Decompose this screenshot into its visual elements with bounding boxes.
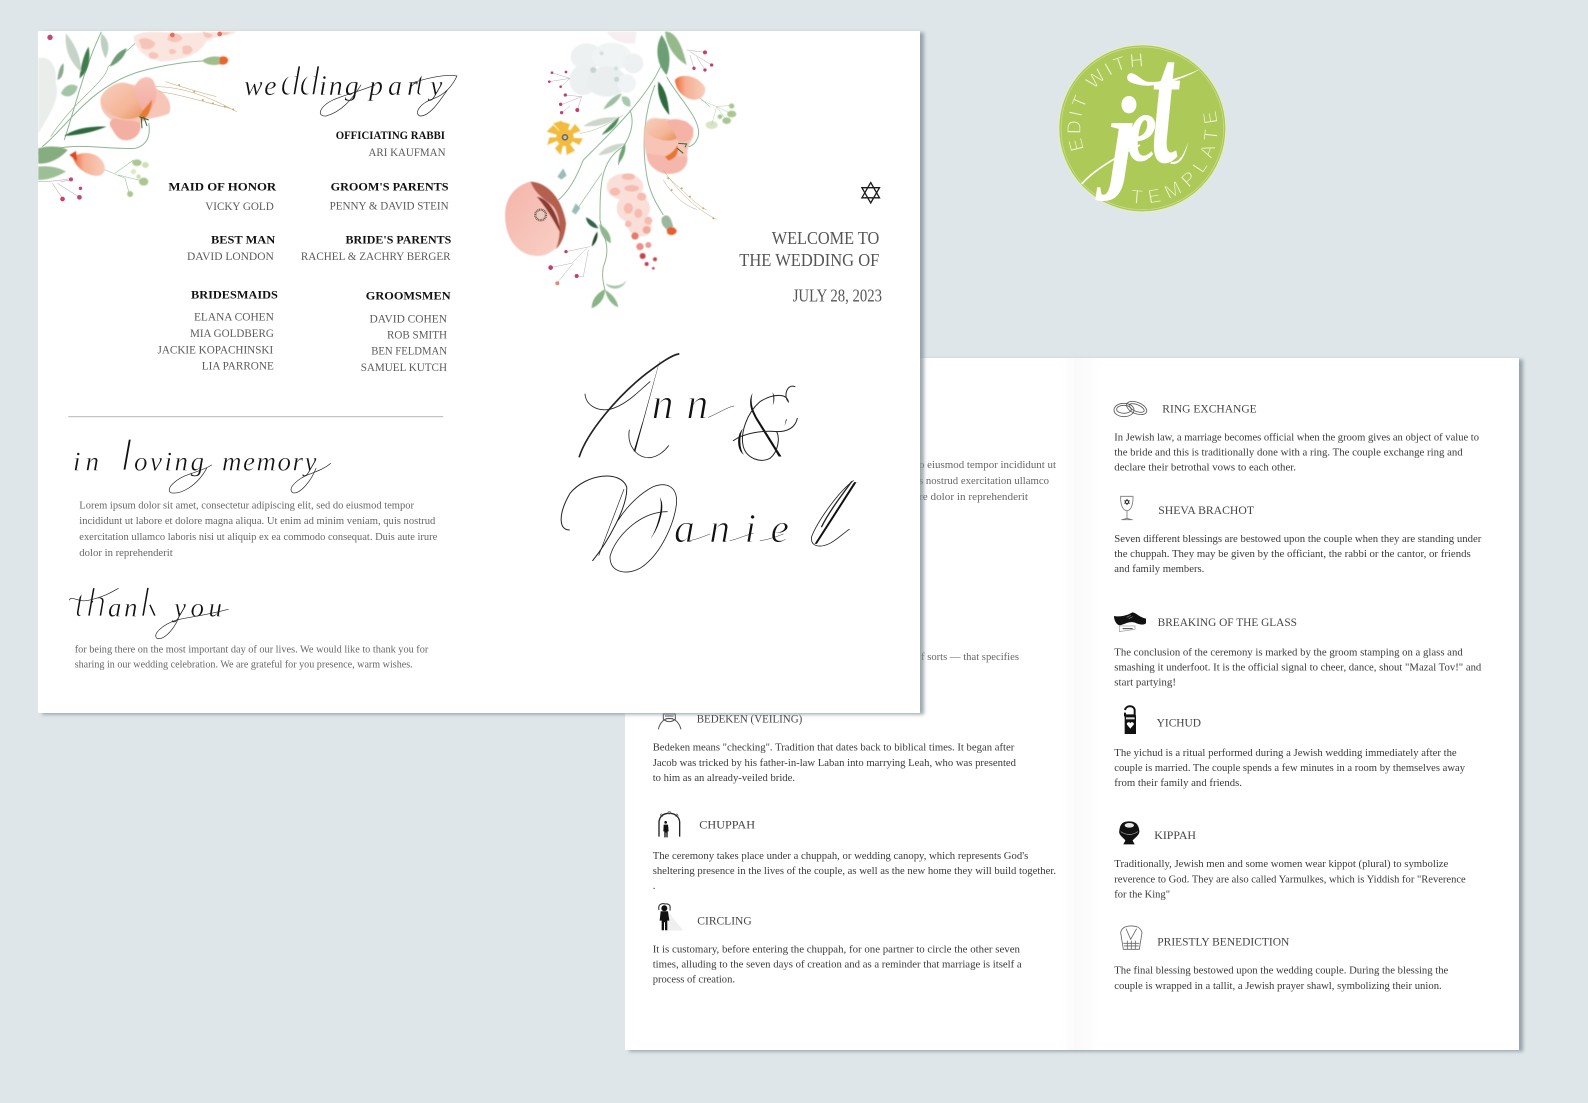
body [1114, 965, 1448, 992]
section: ring exchange [1114, 399, 1479, 474]
title: wedding party: par [367, 71, 423, 102]
logo: edit with jet template [1058, 4, 1227, 212]
title: in loving memory: oving [134, 447, 206, 477]
icon: wine glass [1121, 496, 1133, 520]
body: declare their betrothal vows to each other. [1114, 462, 1296, 474]
Ann &: nn [652, 379, 708, 428]
icon: kippah [1119, 821, 1139, 844]
Daniel: anie [674, 506, 789, 552]
text: in loving memory: exercitation ullamco laboris nisi ut aliquip ex ea commodo consequat. Duis aute irure [79, 531, 437, 543]
bride's parents [301, 234, 451, 263]
body [1114, 646, 1482, 688]
white hydrangea [569, 32, 643, 97]
title: thank you: you [171, 593, 226, 623]
welcome text: THE WEDDING OF [739, 250, 880, 270]
section: sheva brachot [1114, 496, 1482, 575]
body: Traditionally, Jewish men and some women wear kippot (plural) to symbolize [1114, 858, 1448, 870]
icon: door hanger [1125, 706, 1136, 734]
swash [69, 588, 228, 639]
text: thank you: sharing in our wedding celebration. We are grateful for you presence, warm wishes. [75, 659, 413, 671]
icon: rings [1114, 399, 1149, 417]
groomsmen: SAMUEL KUTCH [361, 362, 447, 374]
text: template: TEMPLATE [1132, 112, 1218, 204]
Ann &: & [732, 359, 797, 486]
wedding party list [158, 129, 451, 374]
groomsmen: BEN FELDMAN [371, 346, 447, 358]
floral: cover bouquet [505, 32, 736, 308]
Ann &: A [527, 318, 715, 493]
bud [661, 215, 677, 235]
icon: tallit [1121, 926, 1142, 949]
officiating rabbi [336, 129, 446, 159]
title: in loving memory: memory [222, 447, 318, 477]
body: the chuppah. They may be given by the officiant, the rabbi or the cantor, or friends [1114, 548, 1471, 560]
partly hidden text, left page: f sorts — that specifies [921, 651, 1019, 663]
badge circle [1059, 45, 1226, 212]
leaves [38, 33, 127, 180]
body: smashing it underfoot. It is the official signal to cheer, dance, shout "Mazal Tov!" and [1114, 661, 1482, 673]
swash [561, 476, 853, 572]
body: Seven different blessings are bestowed upon the couple when they are standing under [1114, 533, 1482, 545]
wordmark: jet [1082, 4, 1200, 202]
body [653, 850, 1056, 892]
floral: top-left bouquet [38, 31, 237, 201]
section: bedeken [653, 713, 1016, 784]
pink cluster [607, 173, 657, 270]
title: thank you [69, 581, 228, 639]
icon: chuppah [659, 811, 680, 837]
heading: BREAKING OF THE GLASS [1158, 617, 1297, 629]
body [653, 742, 1016, 784]
title: wedding party [244, 59, 457, 116]
title: in loving memory: in [73, 447, 104, 477]
grass sprig [663, 170, 717, 219]
body: couple is married. The couple spends a few minutes in a room by themselves away [1114, 762, 1465, 774]
text: edit with: EDIT WITH [1068, 54, 1142, 151]
title: thank you: k [140, 581, 160, 627]
title: wedding party: we [244, 71, 278, 102]
title: thank you: th [74, 581, 107, 627]
body [1114, 432, 1479, 474]
body: and family members. [1114, 563, 1205, 575]
text: in loving memory: dolor in reprehenderit [79, 547, 173, 559]
stems [38, 32, 203, 198]
section: priestly benediction [1114, 926, 1448, 992]
date: JULY 28, 2023 [793, 286, 882, 306]
wordmark: jet: t [1151, 4, 1181, 200]
heading: KIPPAH [1154, 830, 1196, 842]
text: thank you [75, 644, 429, 671]
section: kippah [1114, 821, 1466, 900]
partly hidden text, left page: o eiusmod tempor incididunt ut [919, 459, 1056, 471]
berries [47, 32, 222, 201]
bridesmaids: ELANA COHEN [194, 312, 274, 324]
officiating rabbi: OFFICIATING RABBI [336, 129, 445, 142]
wordmark: jet: j [1094, 75, 1137, 202]
bridesmaids: JACKIE KOPACHINSKI [158, 344, 273, 356]
body: sheltering presence in the lives of the couple, as well as the new home they will build together. [653, 865, 1056, 877]
welcome text: WELCOME TO [772, 228, 879, 248]
best man: BEST MAN [211, 234, 276, 247]
Daniel [561, 457, 872, 586]
yellow daisy [547, 121, 583, 155]
body: times, alluding to the seven days of creation and as a reminder that marriage is itself a [653, 959, 1022, 971]
sweet pea flower [100, 77, 170, 140]
maid of honor: MAID OF HONOR [168, 181, 277, 194]
body: to him as an already-veiled bride. [653, 772, 795, 784]
body: It is customary, before entering the chuppah, for one partner to circle the other seven [653, 944, 1020, 956]
swash [169, 463, 331, 493]
heading: PRIESTLY BENEDICTION [1157, 937, 1289, 949]
heading: YICHUD [1157, 718, 1201, 730]
maid of honor [168, 181, 277, 213]
title: wedding party: dd [280, 59, 321, 105]
body: the bride and this is traditionally done with a ring. The couple exchange ring and [1114, 447, 1463, 459]
partly hidden text, left page: re dolor in reprehenderit [919, 491, 1028, 503]
icon: circling couple [659, 904, 683, 931]
panel: inside spread [625, 358, 1519, 1050]
body: The conclusion of the ceremony is marked by the groom stamping on a glass and [1114, 646, 1463, 658]
groom's parents: PENNY & DAVID STEIN [330, 200, 449, 212]
groom's parents [330, 181, 449, 212]
tulip [675, 76, 705, 100]
thin red sprigs [549, 50, 712, 283]
baby's breath [127, 159, 149, 197]
groomsmen: DAVID COHEN [370, 313, 447, 325]
groomsmen: ROB SMITH [387, 330, 447, 342]
heading: CIRCLING [697, 916, 752, 928]
body: The final blessing bestowed upon the wedding couple. During the blessing the [1114, 965, 1448, 977]
bridesmaids: LIA PARRONE [202, 360, 274, 372]
title: wedding party: y [427, 71, 444, 102]
inside spread sheet [625, 358, 1519, 1050]
title: in loving memory: l [120, 430, 133, 481]
icon: star of david [862, 182, 880, 203]
swash [579, 354, 797, 460]
groomsmen: GROOMSMEN [366, 289, 451, 302]
section: circling [653, 904, 1022, 986]
best man [187, 234, 276, 263]
wordmark: jet: e [1127, 74, 1156, 182]
body: The ceremony takes place under a chuppah, or wedding canopy, which represents God's [653, 850, 1028, 862]
stems [558, 60, 710, 290]
section: breaking of the glass [1114, 612, 1482, 688]
swash [320, 75, 457, 116]
body [1114, 747, 1465, 789]
title: wedding party: ing [319, 71, 361, 102]
bride's parents: BRIDE'S PARENTS [346, 234, 451, 247]
bridesmaids: MIA GOLDBERG [190, 328, 274, 340]
title: wedding party: t [415, 63, 426, 103]
grass sprig [155, 82, 237, 112]
icon: veil [658, 714, 681, 729]
ring [1061, 47, 1224, 210]
welcome text [739, 228, 880, 270]
body: In Jewish law, a marriage becomes official when the groom gives an object of value to [1114, 432, 1479, 444]
heading: RING EXCHANGE [1162, 403, 1257, 415]
text: in loving memory: Lorem ipsum dolor sit amet, consectetur adipiscing elit, sed do eiusmod tempor [79, 499, 414, 511]
title: thank you: an [108, 593, 140, 623]
body: process of creation. [653, 974, 735, 986]
text: thank you: for being there on the most important day of our lives. We would like to thank you for [75, 644, 429, 656]
panel: front of program [38, 31, 920, 713]
partly hidden text, left page [919, 459, 1056, 663]
body: from their family and friends. [1114, 777, 1242, 789]
body: start partying! [1114, 676, 1176, 688]
icon: shoe on glass [1114, 612, 1146, 632]
body: Jacob was tricked by his father-in-law Laban into marrying Leah, who was presented [653, 757, 1016, 769]
body: The yichud is a ritual performed during a Jewish wedding immediately after the [1114, 747, 1457, 759]
body [1114, 533, 1482, 575]
Daniel: D [577, 457, 681, 586]
poppy [505, 182, 566, 256]
text: in loving memory [79, 499, 437, 559]
bride's parents: RACHEL & ZACHRY BERGER [301, 251, 451, 263]
bud [202, 56, 228, 65]
heading: CHUPPAH [699, 820, 755, 832]
text: in loving memory: incididunt ut labore et dolore magna aliqua. Ut enim ad minim veniam, quis nostrud [79, 515, 436, 527]
title: couple names [527, 318, 872, 586]
section: chuppah [653, 811, 1056, 892]
body: for the King" [1114, 888, 1170, 900]
officiating rabbi: ARI KAUFMAN [368, 147, 446, 159]
bridesmaids: BRIDESMAIDS [191, 288, 278, 301]
body: Bedeken means "checking". Tradition that dates back to biblical times. It began after [653, 742, 1015, 754]
groomsmen [361, 289, 451, 374]
leaves [557, 32, 687, 308]
bridesmaids [158, 288, 278, 372]
body [653, 944, 1022, 986]
body: reverence to God. They are also called Yarmulkes, which is Yiddish for "Reverence [1114, 873, 1466, 885]
sweet pea [644, 118, 693, 174]
Daniel: l [795, 461, 872, 568]
title: in loving memory [73, 430, 331, 493]
section: yichud [1114, 706, 1465, 789]
partly hidden text, left page: s nostrud exercitation ullamco [919, 475, 1049, 487]
body: couple is wrapped in a tallit, a Jewish prayer shawl, symbolizing their union. [1114, 980, 1442, 992]
heading: BEDEKEN (VEILING) [697, 713, 803, 725]
groom's parents: GROOM'S PARENTS [331, 181, 449, 194]
Ann & [527, 318, 797, 493]
tulip [69, 151, 105, 176]
body: . [653, 880, 656, 892]
heading: SHEVA BRACHOT [1158, 505, 1254, 517]
body [1114, 858, 1466, 900]
best man: DAVID LONDON [187, 251, 274, 263]
baby's breath [706, 103, 736, 129]
maid of honor: VICKY GOLD [205, 201, 274, 213]
front sheet [38, 31, 920, 713]
